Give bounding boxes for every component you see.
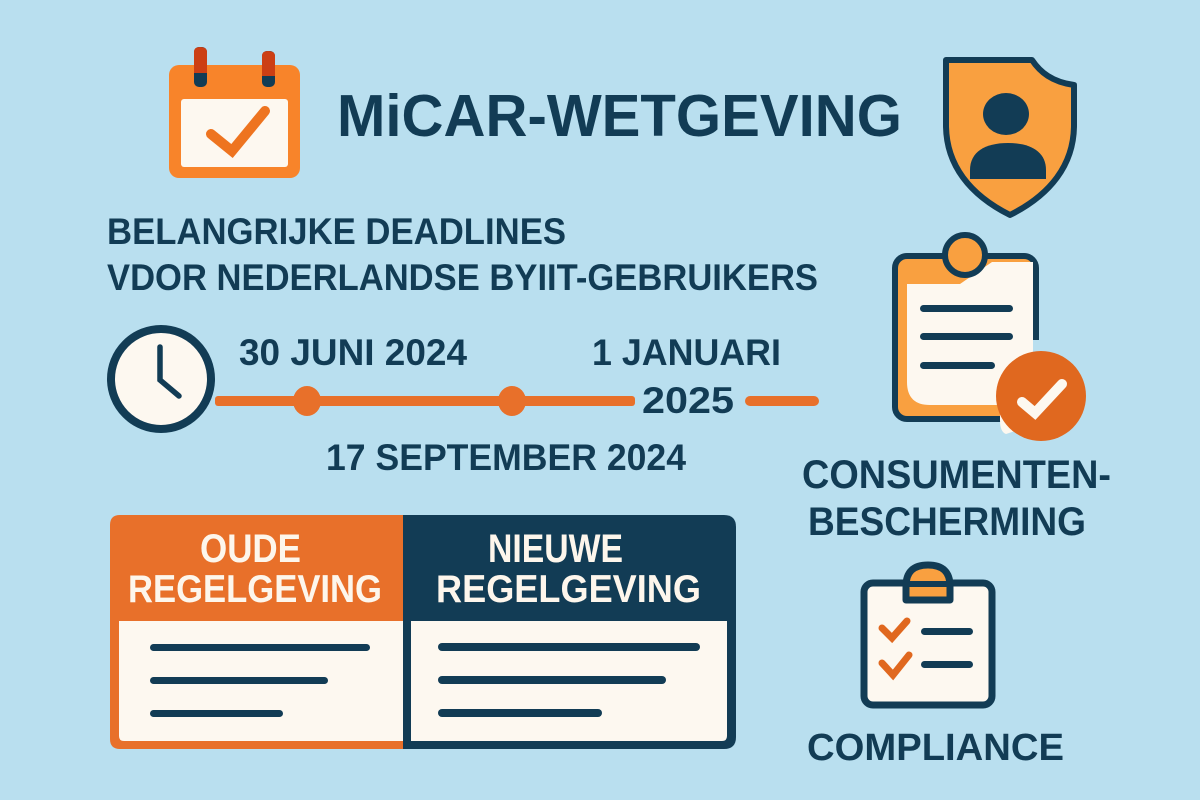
- subtitle: BELANGRIJKE DEADLINES: [107, 211, 566, 252]
- panel: nieuwe regelgeving: [403, 515, 736, 749]
- panel: oude regelgeving: [110, 515, 403, 749]
- date: 1 januari 2025: 1 JANUARI: [592, 332, 781, 373]
- icon: clipboard with check badge: [895, 235, 1086, 441]
- icon: compliance checklist: [864, 565, 992, 705]
- date: 30 juni 2024: 30 JUNI 2024: [239, 332, 467, 373]
- date: 1 januari 2025: 2025: [642, 380, 734, 421]
- subtitle: VDOR NEDERLANDSE BYIIT-GEBRUIKERS: [107, 257, 818, 298]
- label: consumentenbescherming: BESCHERMING: [808, 500, 1086, 544]
- date: 17 september 2024: 17 SEPTEMBER 2024: [326, 437, 686, 478]
- label: consumentenbescherming: [802, 453, 1111, 544]
- heading: oude regelgeving: [128, 527, 382, 611]
- icon: calendar with check: [169, 47, 300, 178]
- title: MiCAR-WETGEVING: [337, 83, 902, 149]
- icon: shield with person: [946, 60, 1074, 215]
- icon: clock: [111, 329, 211, 429]
- timeline marker: 30 juni 2024: [293, 386, 321, 416]
- heading: oude regelgeving: OUDE: [200, 527, 301, 571]
- text lines: [150, 644, 370, 717]
- label: compliance: COMPLIANCE: [807, 727, 1064, 769]
- heading: oude regelgeving: REGELGEVING: [128, 568, 382, 611]
- heading: nieuwe regelgeving: [436, 527, 701, 611]
- label: consumentenbescherming: CONSUMENTEN-: [802, 453, 1111, 497]
- date: 1 januari 2025: [592, 332, 781, 421]
- subtitle: [107, 211, 818, 298]
- heading: nieuwe regelgeving: NIEUWE: [488, 527, 623, 571]
- text lines: [438, 643, 700, 717]
- heading: nieuwe regelgeving: REGELGEVING: [436, 568, 701, 611]
- timeline marker: 17 september 2024: [498, 386, 526, 416]
- timeline: [215, 386, 819, 416]
